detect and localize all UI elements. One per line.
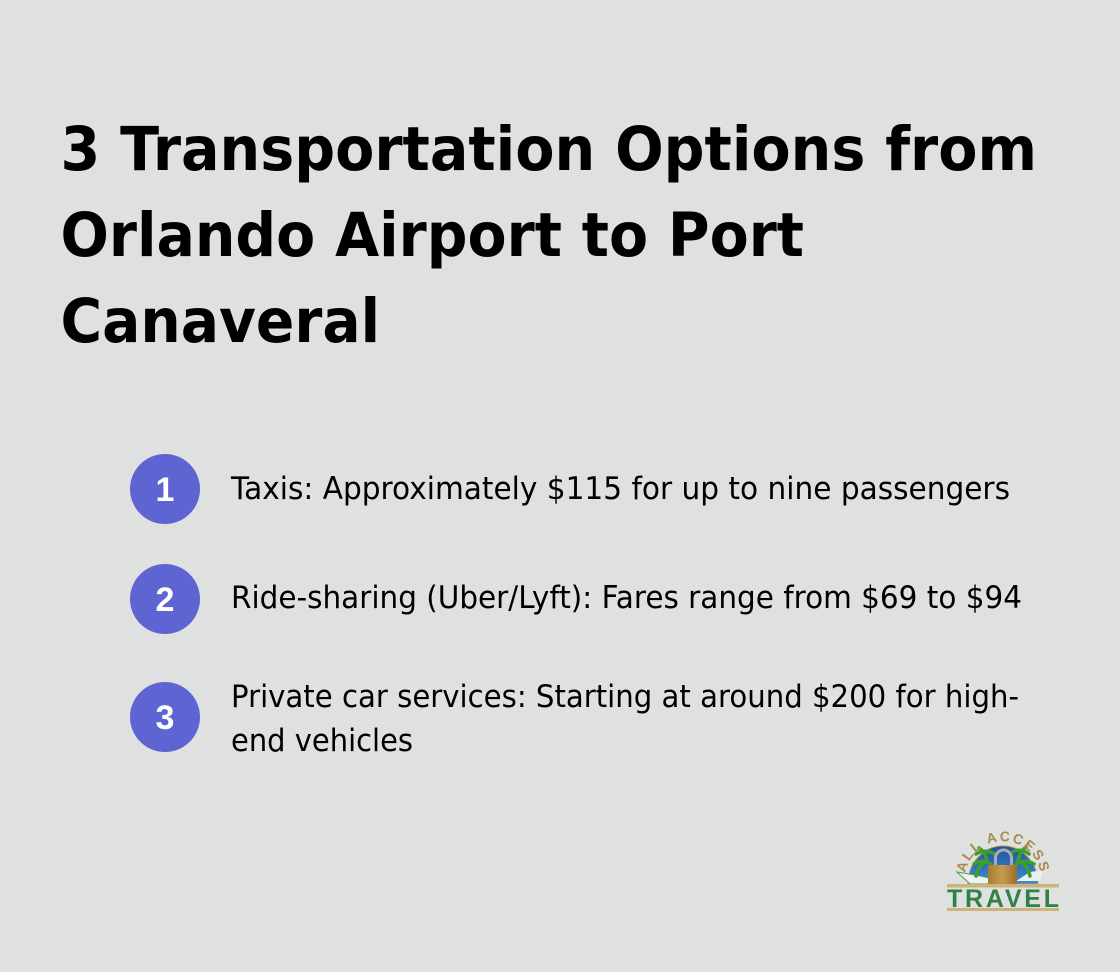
title: Orlando Airport to Port [60, 200, 804, 271]
logo palms [974, 847, 1034, 876]
list item 1: taxis [130, 454, 1010, 524]
number badge 3: 3 [156, 699, 174, 737]
text: ride-sharing: Ride-sharing (Uber/Lyft): Fares range from $69 to $94 [231, 580, 1022, 616]
list item 2: ride-sharing [130, 564, 1022, 634]
logo: All Access Travel [947, 832, 1059, 913]
number badge 2 [130, 564, 200, 634]
list item 3: private car services [130, 679, 1019, 759]
logo padlock [988, 850, 1017, 884]
number badge 2: 2 [156, 581, 174, 619]
logo boats [957, 870, 1043, 884]
title [60, 114, 1037, 357]
number badge 1: 1 [156, 471, 174, 509]
number badge 1 [130, 454, 200, 524]
text: private car services [231, 679, 1019, 759]
text: private car services: end vehicles [231, 723, 413, 759]
text: private car services: Private car services: Starting at around $200 for high- [231, 679, 1019, 715]
logo arc text: ALL ACCESS [957, 832, 1049, 872]
logo dome [968, 846, 1038, 884]
number badge 3 [130, 682, 200, 752]
title: Canaveral [60, 286, 380, 357]
logo wordmark: TRAVEL [947, 885, 1059, 913]
text: taxis: Taxis: Approximately $115 for up to nine passengers [230, 471, 1010, 507]
logo rules [947, 884, 1059, 911]
title: 3 Transportation Options from [60, 114, 1037, 185]
